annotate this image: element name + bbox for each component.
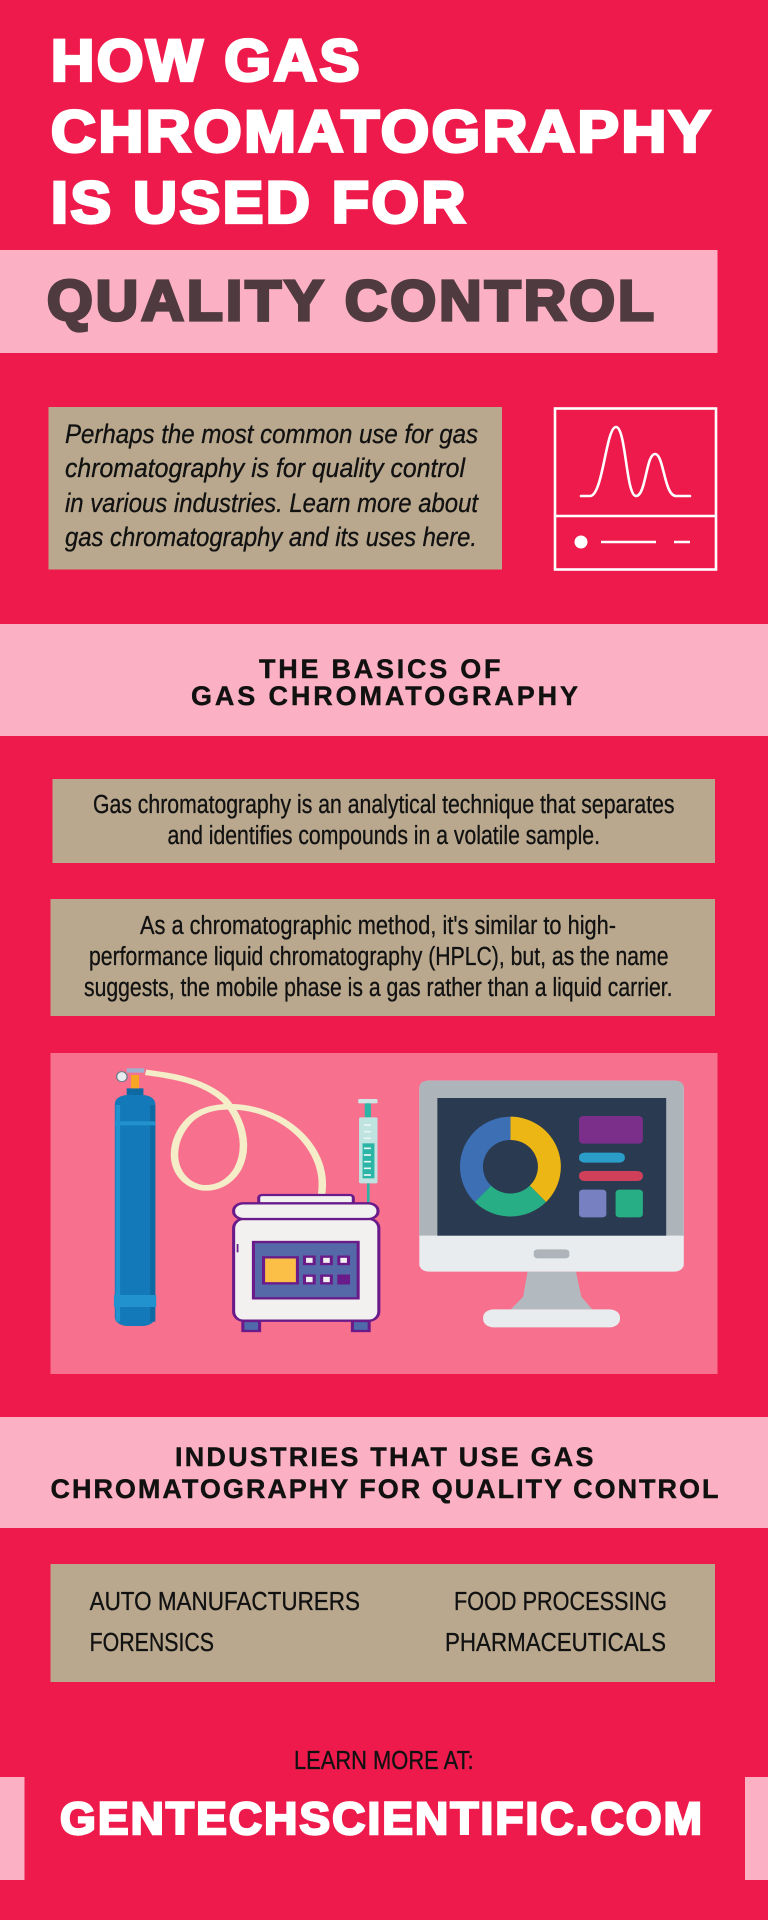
list box: industries: PHARMACEUTICALS: [445, 1627, 666, 1657]
section band: industries: INDUSTRIES THAT USE GAS: [175, 1442, 594, 1472]
title: HOW GAS: [51, 28, 362, 94]
section band: the basics: GAS CHROMATOGRAPHY: [191, 681, 578, 711]
learn more label: LEARN MORE AT:: [294, 1745, 474, 1775]
section band: industries: [0, 1417, 768, 1528]
tube: [146, 1072, 322, 1194]
intro text box: in various industries. Learn more about: [65, 488, 479, 518]
icon: chromatograph machine: [234, 1195, 379, 1331]
icon: gas cylinder: [114, 1068, 156, 1326]
website footer: [0, 1777, 768, 1880]
text box: comparison with HPLC: [50, 899, 715, 1016]
title: CHROMATOGRAPHY: [51, 100, 713, 164]
list box: industries: [50, 1564, 715, 1682]
icon: computer monitor with charts: [419, 1081, 684, 1327]
text box: definition: [52, 779, 715, 863]
list box: industries: FOOD PROCESSING: [454, 1586, 667, 1616]
list box: industries: AUTO MANUFACTURERS: [90, 1586, 360, 1616]
text box: comparison with HPLC: As a chromatographic method, it's similar to high-: [140, 912, 616, 940]
intro text box: Perhaps the most common use for gas: [65, 419, 478, 449]
intro text box: gas chromatography and its uses here.: [65, 522, 477, 552]
intro text box: chromatography is for quality control: [65, 453, 466, 483]
illustration panel: gas chromatography setup: [50, 1053, 718, 1374]
section band: the basics: THE BASICS OF: [259, 654, 500, 684]
website footer: GENTECHSCIENTIFIC.COM: [60, 1793, 704, 1844]
intro text box: [48, 407, 502, 570]
section band: the basics: [0, 624, 768, 736]
list box: industries: FORENSICS: [90, 1627, 214, 1657]
icon: chromatograph readout: [555, 408, 716, 570]
text box: comparison with HPLC: performance liquid chromatography (HPLC), but, as the name: [89, 943, 668, 971]
banner: quality control: QUALITY CONTROL: [47, 269, 657, 333]
text box: definition: and identifies compounds in a volatile sample.: [168, 822, 600, 850]
title: [51, 28, 713, 236]
title: IS USED FOR: [51, 170, 468, 236]
banner: quality control: [0, 250, 718, 353]
section band: industries: CHROMATOGRAPHY FOR QUALITY CONTROL: [50, 1474, 718, 1504]
icon: syringe: [358, 1099, 378, 1203]
